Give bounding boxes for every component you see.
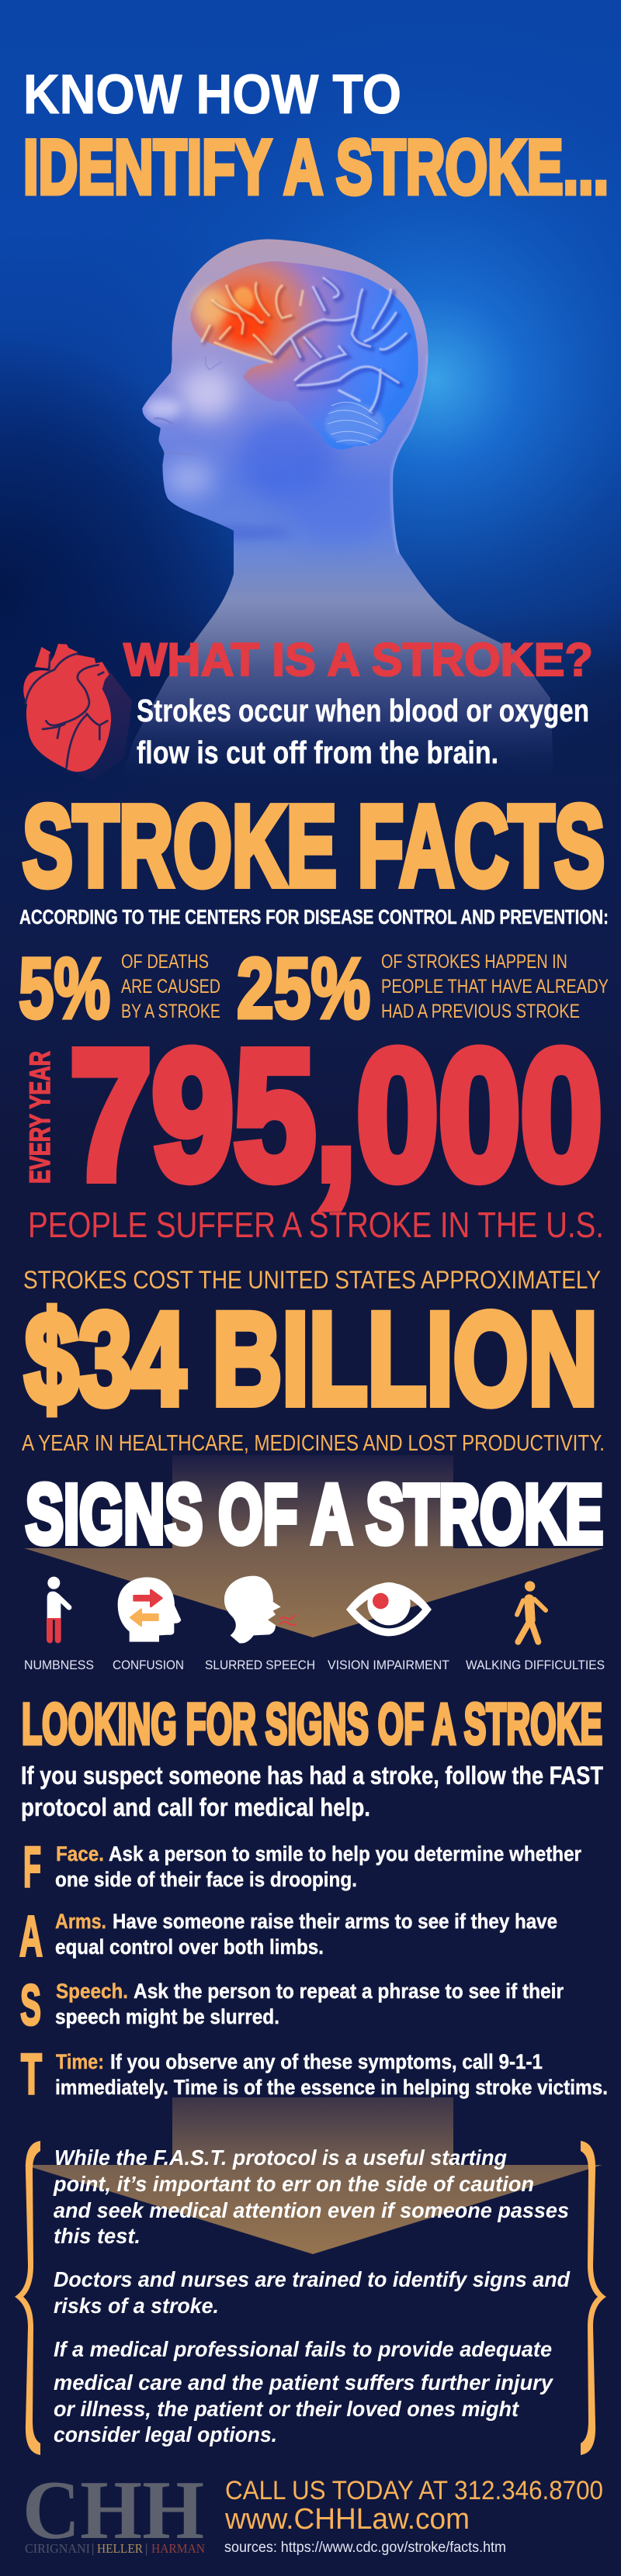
logo: chh: CHH xyxy=(23,2464,204,2557)
fast item: face: Ask a person to smile to help you determine whether xyxy=(109,1842,581,1865)
text: sources: sources: https://www.cdc.gov/stroke/facts.htm xyxy=(224,2540,506,2556)
fast item: arms xyxy=(19,1903,557,1969)
fast item: time: T xyxy=(21,2042,42,2107)
fast item: arms: equal control over both limbs. xyxy=(55,1935,324,1959)
text: caution paragraph: and seek medical attention even if someone passes xyxy=(54,2198,569,2222)
stat: 5 percent: BY A STROKE xyxy=(121,1001,220,1022)
text: stroke definition: flow is cut off from the brain. xyxy=(137,735,498,770)
icon: heart xyxy=(23,644,132,781)
icon: vision impairment xyxy=(346,1582,432,1636)
icon: walking difficulties xyxy=(517,1581,546,1642)
fast item: time: If you observe any of these symptoms, call 9-1-1 xyxy=(110,2050,543,2073)
labels: signs of a stroke: CONFUSION xyxy=(113,1658,184,1672)
title: know how to: KNOW HOW TO xyxy=(23,64,401,126)
fast item: face: Face. xyxy=(56,1842,104,1865)
bracket: right xyxy=(581,2141,606,2455)
text: doctors paragraph xyxy=(54,2267,571,2318)
text: legal paragraph: consider legal options. xyxy=(54,2422,277,2446)
labels: signs of a stroke: WALKING DIFFICULTIES xyxy=(466,1658,605,1672)
brain folds xyxy=(202,283,303,362)
stat: 5 percent: OF DEATHS xyxy=(121,951,209,973)
text: caution paragraph xyxy=(53,2146,569,2248)
text: legal paragraph: medical care and the patient suffers further injury xyxy=(54,2370,553,2394)
fast item: speech: S xyxy=(20,1973,41,2037)
text: doctors paragraph: Doctors and nurses are trained to identify signs and xyxy=(54,2267,571,2291)
fast item: arms: Arms. xyxy=(55,1910,106,1933)
stat: 5 percent: 5% xyxy=(19,941,110,1036)
fast item: face: F xyxy=(23,1835,41,1899)
arrow: fast to caution xyxy=(24,2097,602,2254)
text: legal paragraph: or illness, the patient or their loved ones might xyxy=(54,2397,520,2421)
label: every year: EVERY YEAR xyxy=(24,1051,56,1184)
stat: 25 percent: 25% xyxy=(237,941,370,1036)
fast item: speech: speech might be slurred. xyxy=(55,2005,279,2028)
text: fast intro: protocol and call for medical help. xyxy=(21,1793,370,1821)
bracket: left xyxy=(15,2141,40,2455)
illustration: human head with glowing brain xyxy=(119,239,553,787)
labels: signs of a stroke xyxy=(24,1658,605,1672)
text: website: www.CHHLaw.com xyxy=(224,2503,470,2536)
text: doctors paragraph: risks of a stroke. xyxy=(54,2294,219,2318)
logo: chh: CIRIGNANI xyxy=(25,2541,90,2556)
fast item: time xyxy=(21,2042,608,2107)
stat: 25 percent: OF STROKES HAPPEN IN xyxy=(381,951,567,973)
text: stroke definition xyxy=(137,693,589,770)
brain fold shadows xyxy=(204,285,293,357)
fast item: arms: Have someone raise their arms to see if they have xyxy=(113,1910,557,1933)
labels: signs of a stroke: NUMBNESS xyxy=(24,1658,94,1672)
text: fast intro xyxy=(21,1762,603,1821)
labels: signs of a stroke: VISION IMPAIRMENT xyxy=(328,1658,449,1672)
logo: chh: | xyxy=(145,2541,147,2556)
fast item: speech xyxy=(20,1973,564,2037)
stat: 5 percent xyxy=(19,941,220,1036)
fast item: face: one side of their face is drooping. xyxy=(55,1868,357,1891)
logo: chh: | xyxy=(92,2541,94,2556)
text: legal paragraph: If a medical professional fails to provide adequate xyxy=(54,2337,552,2361)
fast item: speech: Ask the person to repeat a phrase to see if their xyxy=(134,1980,564,2003)
text: legal paragraph xyxy=(54,2337,553,2446)
text: caution paragraph: this test. xyxy=(54,2224,141,2248)
nose and mouth details xyxy=(154,357,221,455)
stat: 5 percent: ARE CAUSED xyxy=(121,976,220,998)
labels: signs of a stroke: SLURRED SPEECH xyxy=(205,1658,315,1672)
fast item: time: Time: xyxy=(56,2050,104,2073)
icon: numbness xyxy=(47,1577,69,1643)
text: caution paragraph: point, it’s important to err on the side of caution xyxy=(53,2172,534,2196)
heading: what is a stroke: WHAT IS A STROKE? xyxy=(123,634,593,686)
brain xyxy=(190,261,418,449)
logo: chh: HARMAN xyxy=(151,2541,205,2556)
fast item: face xyxy=(23,1835,581,1899)
icon: confusion xyxy=(118,1577,181,1642)
icon: slurred speech xyxy=(224,1576,297,1644)
text: caution paragraph: While the F.A.S.T. protocol is a useful starting xyxy=(54,2146,507,2170)
stat: 25 percent xyxy=(237,941,609,1036)
arrow: signs of a stroke xyxy=(24,1455,604,1637)
fast item: speech: Speech. xyxy=(56,1980,128,2003)
logo: chh: HELLER xyxy=(97,2541,144,2556)
fast item: arms: A xyxy=(19,1903,43,1969)
